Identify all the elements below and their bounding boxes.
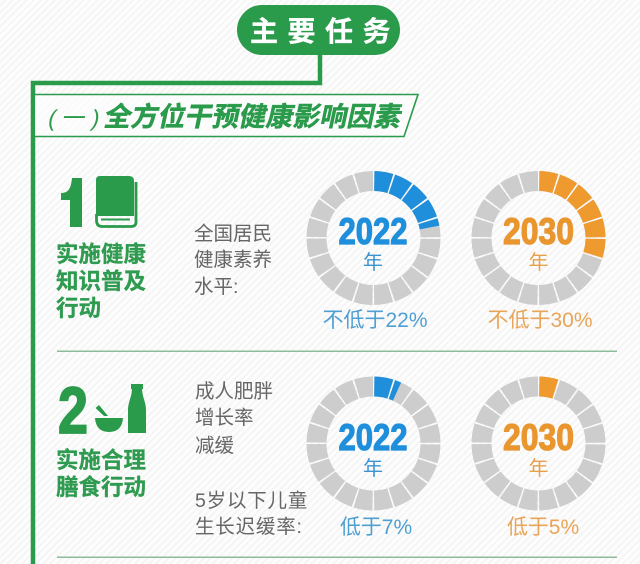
icon: book [96, 176, 136, 226]
donut: 2030 health literacy 30%: 2030 [503, 211, 574, 252]
task 2 heading [56, 447, 146, 500]
task 2 indicator text: 减缓 [195, 435, 234, 457]
label: below 7%: 低于7% [340, 516, 412, 539]
donut: 2030 health literacy 30% [482, 181, 596, 295]
task 2 heading: 膳食行动 [56, 474, 146, 500]
connector lines [33, 50, 320, 564]
section banner: 全方位干预健康影响因素 [102, 101, 405, 132]
label: not below 22%: 不低于22% [322, 309, 428, 332]
title pill: 主要任务 [250, 16, 400, 47]
task 2 indicator text: 成人肥胖 [195, 380, 273, 402]
task 1 heading: 实施健康 [56, 241, 146, 267]
donut: 2030 health literacy 30%: 年 [528, 251, 548, 274]
donut: 2022 obesity and stunting 7%: 2022 [338, 417, 408, 458]
donut: 2022 health literacy 22%: 年 [363, 251, 383, 274]
label: below 5%: 低于5% [507, 516, 579, 539]
task 1 indicator text [194, 223, 272, 298]
task 1 indicator text: 水平: [194, 276, 238, 298]
donut: 2022 health literacy 22%: 2022 [338, 211, 408, 252]
donut: 2030 obesity and stunting 5% [482, 386, 596, 500]
number 1 [61, 178, 82, 227]
donut: 2022 obesity and stunting 7% [316, 386, 430, 500]
donut: 2030 obesity and stunting 5%: 年 [528, 457, 548, 480]
section banner: ( 一 ) [46, 105, 102, 131]
donut: 2030 obesity and stunting 5%: 2030 [503, 417, 574, 458]
task 2 heading: 实施合理 [56, 447, 146, 473]
task 1 heading: 知识普及 [56, 269, 146, 294]
task 1 heading [56, 241, 146, 321]
task 2 indicator text: 5岁以下儿童 [195, 490, 308, 512]
icon: mortar and pestle [95, 405, 123, 432]
section banner [35, 94, 418, 136]
task 1 heading: 行动 [56, 296, 101, 321]
task 2 indicator text: 增长率 [195, 407, 254, 429]
number 2: 2 [58, 373, 88, 447]
icon: bottle [128, 384, 146, 433]
title pill [237, 5, 400, 55]
label: not below 30%: 不低于30% [487, 309, 593, 332]
task 2 indicator text [195, 380, 308, 538]
panel: task 2 [56, 373, 596, 539]
donut: 2022 health literacy 22% [316, 181, 430, 295]
task 2 indicator text: 生长迟缓率: [195, 516, 303, 538]
task 1 indicator text: 健康素养 [194, 249, 272, 271]
donut: 2022 obesity and stunting 7%: 年 [363, 457, 383, 480]
task 1 indicator text: 全国居民 [194, 223, 272, 245]
panel: task 1 [56, 176, 596, 332]
